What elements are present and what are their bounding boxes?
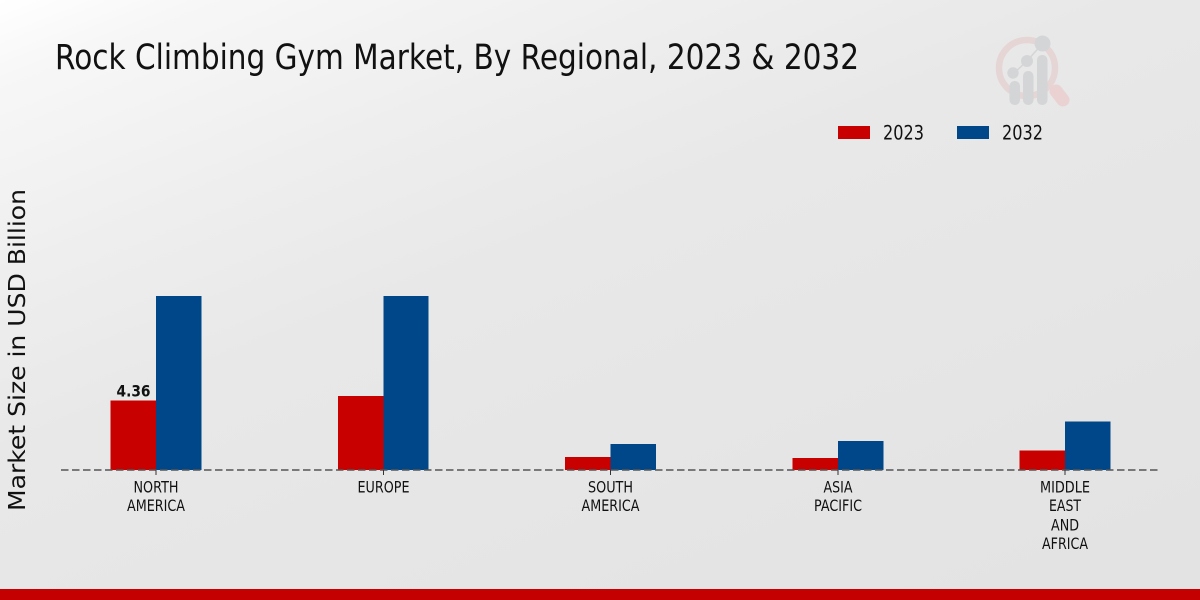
legend bbox=[838, 121, 1043, 144]
label: Europe: EUROPE bbox=[358, 478, 410, 497]
bars: North America bbox=[110, 296, 202, 470]
y axis title: Market Size in USD Billion bbox=[5, 189, 31, 511]
label: Asia Pacific: ASIA bbox=[824, 478, 853, 497]
bar chart bbox=[61, 296, 1160, 475]
legend swatch: 2032 bbox=[957, 126, 989, 139]
label: Asia Pacific bbox=[814, 478, 862, 515]
label: Asia Pacific: PACIFIC bbox=[814, 496, 862, 515]
bottom red bar bbox=[0, 589, 1200, 600]
label: South America bbox=[582, 478, 640, 515]
label: North America: AMERICA bbox=[127, 496, 185, 515]
bars: South America bbox=[565, 444, 656, 470]
legend label: 2023: 2023 bbox=[883, 121, 924, 144]
label: Middle East and Africa: EAST bbox=[1049, 496, 1081, 515]
label: South America: SOUTH bbox=[588, 478, 633, 497]
bars: Asia Pacific bbox=[792, 441, 884, 470]
label: North America: NORTH bbox=[134, 478, 178, 497]
label: South America: AMERICA bbox=[582, 496, 640, 515]
x axis labels bbox=[127, 478, 1090, 553]
legend swatch: 2023 bbox=[838, 126, 870, 139]
label: Middle East and Africa: AND bbox=[1051, 516, 1079, 534]
icon: magnifier logo watermark bbox=[999, 36, 1063, 105]
label: Middle East and Africa: MIDDLE bbox=[1040, 478, 1090, 497]
label: Middle East and Africa bbox=[1040, 478, 1090, 553]
label: Middle East and Africa: AFRICA bbox=[1042, 534, 1088, 553]
bars: Middle East and Africa bbox=[1020, 422, 1110, 470]
label: North America bbox=[127, 478, 185, 515]
value label: 4.36: 4.36 bbox=[116, 382, 150, 401]
legend label: 2032: 2032 bbox=[1002, 121, 1043, 144]
title: Rock Climbing Gym Market, By Regional, 2023 & 2032 bbox=[55, 38, 859, 78]
bars: Europe bbox=[338, 296, 428, 470]
